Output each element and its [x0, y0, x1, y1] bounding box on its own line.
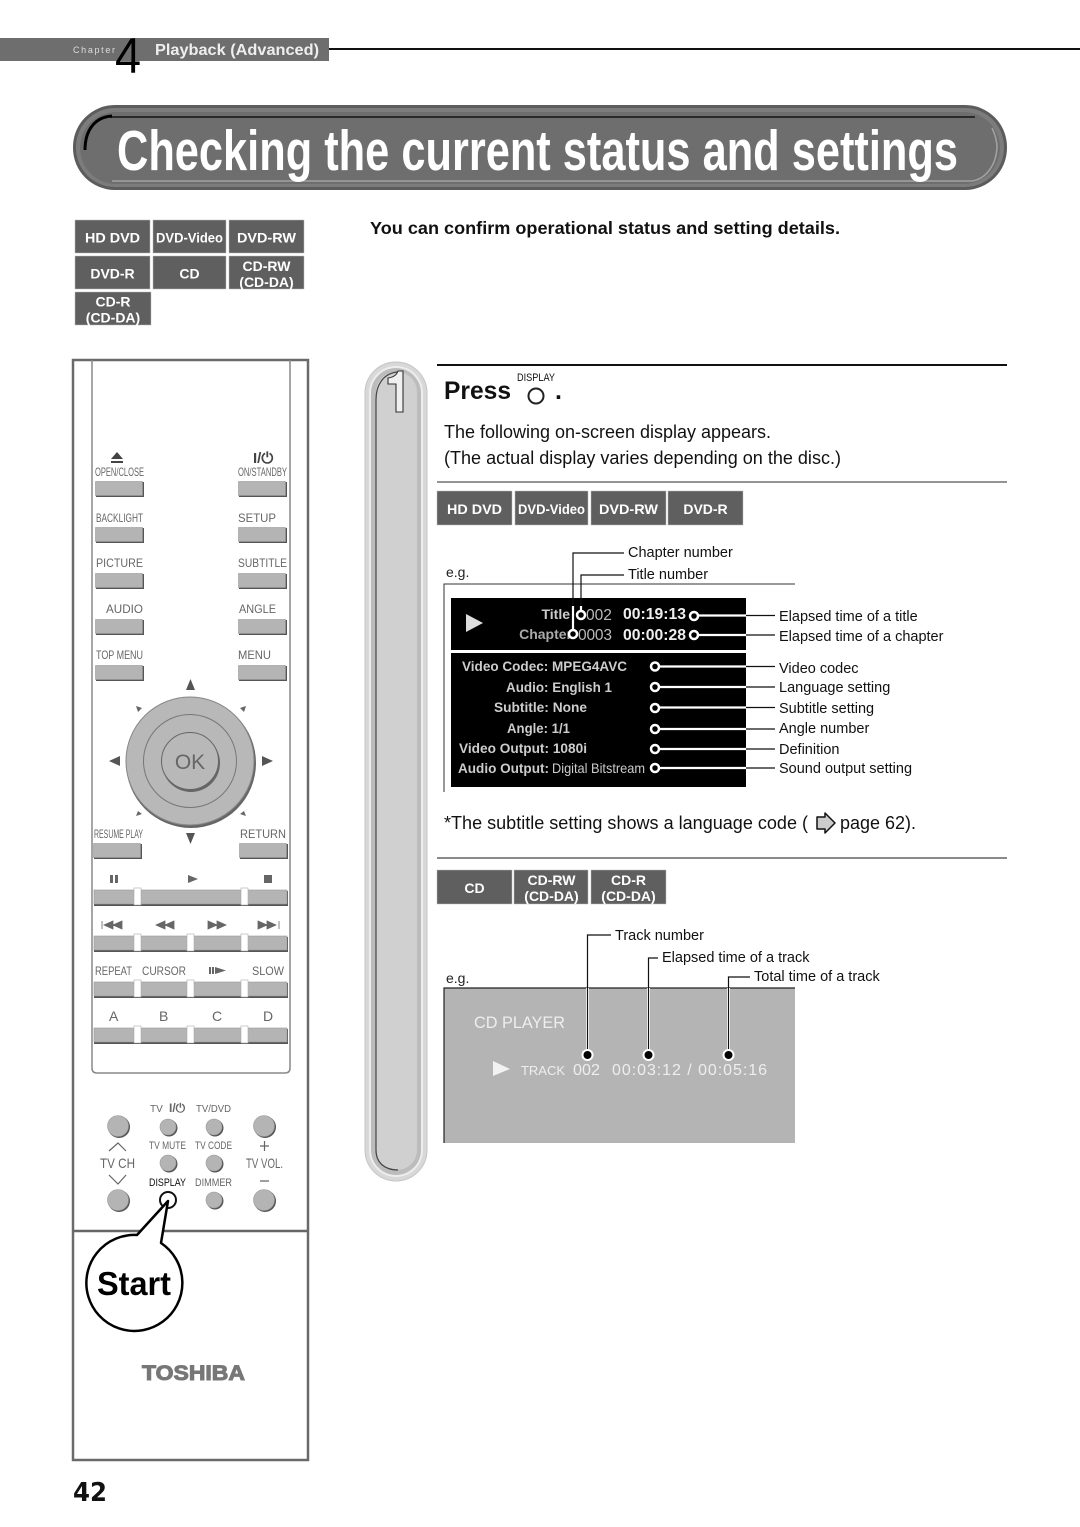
playback buttons: A	[109, 1008, 119, 1024]
CD leader lines	[582, 935, 750, 1060]
subtitle note	[437, 813, 1007, 858]
TV control buttons: TV MUTE	[149, 1140, 186, 1152]
playback buttons: CURSOR	[142, 964, 186, 978]
callout labels: Chapter number	[628, 545, 733, 561]
playback buttons: RETURN	[240, 827, 286, 841]
disc compatibility badges: DVD-RW	[237, 230, 297, 246]
CD player display diagram: 002	[573, 1062, 600, 1079]
TV control buttons: DISPLAY	[149, 1177, 187, 1189]
chapter header: 4	[115, 28, 141, 84]
CD disc badges	[437, 870, 666, 904]
CD player display diagram: e.g.	[446, 970, 469, 986]
settings panel	[451, 653, 746, 787]
CD disc badges: CD-R	[611, 872, 646, 888]
callout labels: Title number	[628, 567, 708, 583]
TV control buttons: I/⏻	[169, 1101, 186, 1115]
settings panel: Subtitle: None	[494, 699, 587, 715]
DVD disc badges: DVD-R	[683, 501, 728, 517]
callout labels: Angle number	[779, 721, 869, 737]
menu buttons: SUBTITLE	[238, 556, 287, 570]
step description	[437, 422, 1007, 482]
disc compatibility badges: (CD-DA)	[239, 274, 294, 290]
CD disc badges: CD	[464, 880, 485, 896]
menu buttons: PICTURE	[96, 556, 143, 570]
TV control buttons: TV CH	[100, 1155, 135, 1171]
CD callout labels: Elapsed time of a track	[662, 950, 810, 966]
TV control buttons	[100, 1101, 283, 1212]
CD player display diagram: TRACK	[521, 1064, 566, 1078]
chapter header: Chapter	[73, 45, 115, 55]
DVD disc badges: HD DVD	[447, 501, 502, 517]
menu buttons: TOP MENU	[96, 648, 143, 662]
step description: (The actual display varies depending on the disc.)	[444, 448, 841, 468]
callout labels: Subtitle setting	[779, 701, 874, 717]
TV control buttons: TV	[150, 1104, 163, 1115]
title banner	[73, 105, 1007, 190]
TV control buttons: DIMMER	[195, 1177, 232, 1189]
disc compatibility badges: CD-RW	[243, 258, 291, 274]
CD callout labels	[615, 928, 880, 985]
status panel: Chapter	[519, 626, 573, 642]
CD callout labels: Total time of a track	[754, 969, 880, 985]
direction pad: OK	[175, 751, 205, 774]
status panel: 00:19:13	[623, 606, 686, 623]
chapter header: Playback (Advanced)	[155, 42, 319, 59]
menu buttons: BACKLIGHT	[96, 511, 143, 525]
leader lines	[569, 553, 775, 772]
callout labels: Language setting	[779, 680, 890, 696]
callout labels: Video codec	[779, 661, 859, 677]
step heading: press display: .	[555, 377, 562, 405]
menu buttons: SETUP	[238, 511, 276, 525]
status panel: 002	[586, 607, 612, 624]
callout labels: Elapsed time of a chapter	[779, 629, 944, 645]
TV control buttons: TV VOL.	[246, 1155, 283, 1171]
playback buttons: D	[263, 1008, 273, 1024]
settings panel: Audio: English 1	[506, 679, 612, 695]
callout labels	[628, 545, 944, 777]
TV control buttons: TV/DVD	[196, 1104, 231, 1115]
menu buttons: ANGLE	[239, 602, 276, 616]
direction pad	[109, 679, 273, 844]
chapter header	[0, 28, 1080, 84]
menu buttons: MENU	[238, 648, 271, 662]
CD player display diagram: 00:03:12 / 00:05:16	[612, 1062, 767, 1079]
CD disc badges: (CD-DA)	[601, 888, 656, 904]
DVD on-screen display diagram: e.g.	[446, 564, 469, 580]
playback buttons: C	[212, 1008, 222, 1024]
disc compatibility badges: (CD-DA)	[86, 310, 140, 326]
subtitle note: page 62).	[840, 813, 916, 833]
disc compatibility badges: DVD-Video	[156, 230, 223, 246]
menu buttons: ON/STANDBY	[238, 465, 287, 479]
settings panel: Audio Output:	[458, 760, 549, 776]
settings panel: Video Codec: MPEG4AVC	[462, 658, 627, 674]
CD player display diagram	[444, 928, 880, 1143]
status panel: Title	[541, 606, 570, 622]
Start callout: Start	[97, 1265, 171, 1302]
TV control buttons: TV CODE	[195, 1140, 232, 1152]
page number: 42	[73, 1478, 107, 1508]
menu buttons: OPEN/CLOSE	[95, 465, 144, 479]
CD disc badges: (CD-DA)	[524, 888, 579, 904]
step heading: press display: Press	[444, 377, 511, 405]
step heading: press display	[437, 365, 1007, 405]
callout labels: Elapsed time of a title	[779, 609, 918, 625]
disc compatibility badges: HD DVD	[85, 230, 140, 246]
Toshiba logo: TOSHIBA	[142, 1362, 245, 1385]
menu buttons	[95, 450, 287, 681]
step description: The following on-screen display appears.	[444, 422, 771, 442]
status panel: 0003	[578, 627, 612, 644]
playback buttons: REPEAT	[95, 964, 133, 978]
settings panel: Digital Bitstream	[552, 760, 645, 776]
playback buttons: SLOW	[252, 964, 285, 978]
disc compatibility badges: CD-R	[96, 294, 130, 310]
callout labels: Sound output setting	[779, 761, 912, 777]
menu buttons: I/⏻	[253, 450, 273, 467]
subtitle note: *The subtitle setting shows a language code (	[444, 813, 808, 833]
status panel	[451, 598, 746, 650]
status panel: 00:00:28	[623, 627, 686, 644]
DVD disc badges: DVD-Video	[518, 501, 585, 517]
settings panel: Angle: 1/1	[507, 720, 570, 736]
disc compatibility badges: CD	[179, 266, 200, 282]
menu buttons: AUDIO	[106, 602, 143, 616]
step heading: press display: DISPLAY	[517, 372, 556, 384]
disc compatibility badges: DVD-R	[90, 266, 135, 282]
disc compatibility badges	[75, 220, 304, 326]
intro sentence: You can confirm operational status and setting details.	[370, 218, 840, 238]
Start callout	[86, 1192, 182, 1331]
CD disc badges: CD-RW	[528, 872, 576, 888]
step 1 side bar	[365, 362, 427, 1181]
DVD on-screen display diagram	[444, 545, 944, 792]
playback buttons	[94, 827, 288, 1044]
settings panel: Video Output: 1080i	[459, 740, 587, 756]
CD callout labels: Track number	[615, 928, 704, 944]
playback buttons: RESUME PLAY	[94, 827, 143, 841]
CD player display diagram: CD PLAYER	[474, 1013, 565, 1032]
DVD disc badges	[437, 491, 743, 525]
playback buttons: B	[159, 1008, 168, 1024]
DVD disc badges: DVD-RW	[599, 501, 659, 517]
callout labels: Definition	[779, 742, 839, 758]
panel: remote control	[73, 360, 308, 1460]
